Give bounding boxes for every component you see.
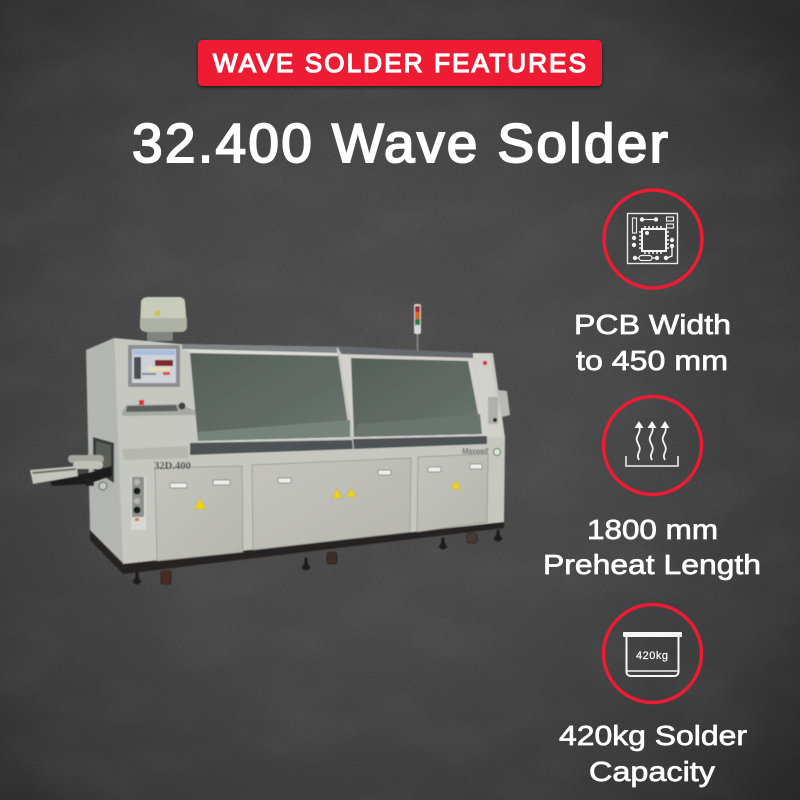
side panel — [86, 338, 124, 564]
signal tower light — [414, 304, 421, 351]
feature: solder capacity — [559, 604, 747, 787]
text: PCB width to 450 mm — [574, 309, 731, 376]
touch screen monitor — [128, 345, 180, 387]
text: 1800 mm preheat length — [543, 514, 761, 580]
warning labels — [194, 480, 461, 509]
badge: wave solder features: WAVE SOLDER FEATURES — [213, 48, 586, 78]
badge: wave solder features — [198, 40, 602, 86]
icon: solder pot: 420kg — [636, 650, 668, 662]
control shelf — [122, 400, 197, 416]
text: 1800 mm preheat length: Preheat Length — [543, 549, 761, 580]
text: 420kg solder capacity — [559, 720, 747, 787]
text: PCB width to 450 mm: to 450 mm — [576, 345, 728, 376]
conveyor entrance — [30, 437, 114, 490]
text: 1800 mm preheat length: 1800 mm — [587, 514, 718, 545]
left window — [182, 344, 353, 455]
right window — [337, 346, 488, 449]
feature: preheat length — [543, 396, 761, 580]
fan unit — [140, 297, 187, 341]
front body — [114, 338, 505, 564]
text: PCB width to 450 mm: PCB Width — [574, 309, 731, 340]
feature: PCB width — [574, 190, 731, 376]
electrical control strip — [131, 477, 146, 530]
left lower step shading — [122, 446, 188, 460]
icon: circuit board — [604, 190, 702, 288]
wave solder machine illustration — [30, 297, 510, 584]
icon: rising heat — [604, 396, 702, 494]
right end panel — [473, 353, 510, 456]
machine model label: 32D.400 — [154, 461, 191, 472]
text: 420kg solder capacity: Capacity — [589, 756, 715, 787]
machine feet — [133, 530, 502, 584]
icon: solder pot — [604, 604, 702, 702]
cabinet doors — [155, 454, 488, 561]
door handles — [170, 464, 482, 488]
text: 420kg solder capacity: 420kg Solder — [559, 720, 747, 751]
title: 32.400 Wave Solder — [132, 112, 668, 174]
brand label: Maxwell — [462, 447, 488, 456]
base plinth — [90, 522, 504, 574]
